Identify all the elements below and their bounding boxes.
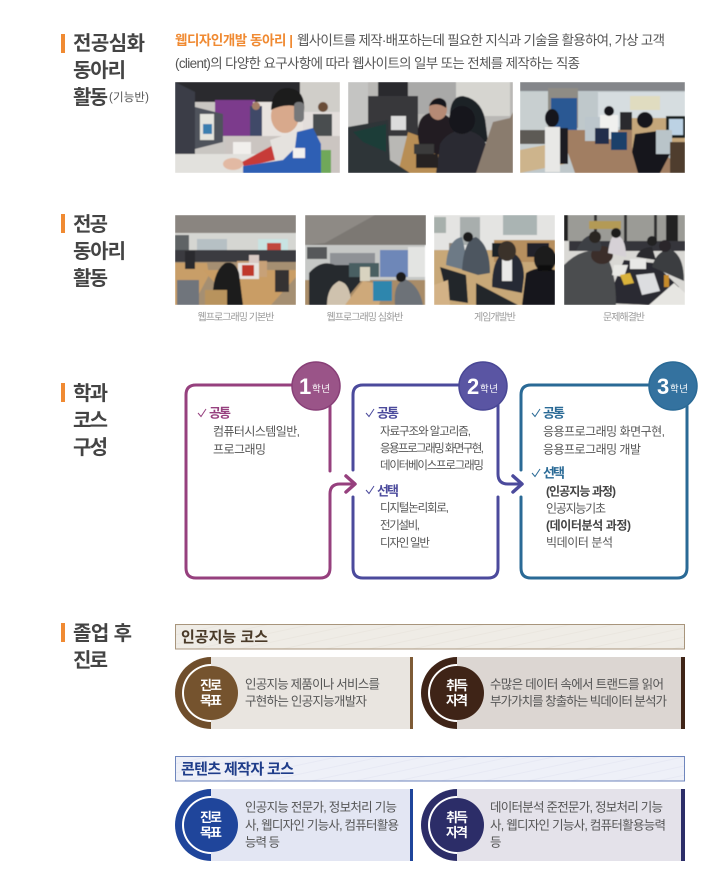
- photo: 웹프로그래밍 기본반: [175, 215, 296, 305]
- panel: 2학년: [353, 362, 522, 578]
- photo: 문제해결반: [564, 215, 685, 305]
- badge: 1학년: [292, 362, 340, 410]
- panel: 콘텐츠 취득 자격: 등: [490, 836, 502, 850]
- list: 공통: [198, 406, 300, 456]
- list: 공통: 응용프로그래밍 화면구현,: [543, 424, 665, 438]
- section heading: 졸업 후 진로: 진로: [73, 649, 108, 672]
- caption: 게임개발반: 게임개발반: [474, 310, 516, 324]
- section heading: 학과 코스 구성: 학과: [73, 382, 108, 405]
- box outline and arrow: 2학년 to 3학년: [353, 385, 522, 578]
- banner: 콘텐츠 제작자 코스: 콘텐츠 제작자 코스: [181, 761, 294, 778]
- caption: 웹프로그래밍 심화반: 웹프로그래밍 심화반: [326, 312, 404, 324]
- panel: 인공지능 취득 자격: 부가가치를 창출하는 빅데이터 분석가: [490, 694, 667, 708]
- list: 선택: 디자인 일반: [380, 536, 430, 550]
- section heading: 전공심화 동아리 활동: 활동: [73, 86, 108, 109]
- list: 공통: 공통: [209, 406, 231, 420]
- badge: 2학년: 2: [467, 374, 479, 399]
- panel: 콘텐츠 진로 목표: 능력 등: [245, 836, 280, 850]
- panel: 인공지능 진로 목표: 진로: [200, 678, 222, 693]
- panel: 인공지능 진로 목표: 목표: [200, 693, 222, 708]
- photo: 웹프로그래밍 심화반: [305, 215, 426, 305]
- list: 선택: 선택: [543, 466, 565, 480]
- banner: 인공지능 코스: [176, 624, 684, 649]
- panel: 콘텐츠 진로 목표: 인공지능 전문가, 정보처리 기능: [245, 800, 397, 814]
- section heading: 졸업 후 진로: 졸업 후: [73, 622, 132, 645]
- section heading: 전공 동아리 활동: 전공: [73, 213, 108, 236]
- panel: 인공지능 진로 목표: 구현하는 인공지능개발자: [245, 694, 367, 708]
- panel: 인공지능 취득 자격: 수많은 데이터 속에서 트랜드를 읽어: [490, 678, 664, 692]
- badge: 2학년: [459, 362, 507, 410]
- panel: 콘텐츠 취득 자격: 자격: [446, 825, 468, 840]
- list: 공통: 데이터베이스프로그래밍: [380, 459, 484, 472]
- list: 공통: [366, 406, 484, 472]
- box outline and arrow: 1학년 to 2학년: [186, 385, 355, 578]
- panel: 콘텐츠 진로 목표: 목표: [200, 825, 222, 840]
- photo: competitor at computer: [175, 82, 340, 173]
- panel: 인공지능 취득 자격: [421, 657, 685, 729]
- badge: 3학년: 3: [657, 374, 669, 399]
- list: 선택: 전기설비,: [380, 519, 420, 532]
- text block: 웹디자인개발 동아리 description: (client)의 다양한 요구사항에 따라 웹사이트의 일부 또는 전체를 제작하는 직종: [175, 56, 580, 71]
- badge: 2학년: 학년: [480, 384, 498, 395]
- list: 선택: (인공지능 과정): [546, 484, 616, 498]
- banner: 인공지능 코스: 인공지능 코스: [181, 629, 268, 646]
- banner: 콘텐츠 제작자 코스: [176, 756, 684, 781]
- section heading: 전공 동아리 활동: 동아리: [73, 240, 126, 263]
- badge: 1학년: 학년: [312, 384, 330, 395]
- text block: 웹디자인개발 동아리 description: [175, 33, 665, 71]
- text block: 웹디자인개발 동아리 description: 웹디자인개발 동아리 |: [175, 33, 293, 48]
- panel: 콘텐츠 취득 자격: 데이터분석 준전문가, 정보처리 기능: [490, 800, 663, 814]
- panel: 인공지능 취득 자격: 취득: [446, 678, 468, 693]
- panel: 콘텐츠 진로 목표: 진로: [200, 810, 222, 825]
- panel: 콘텐츠 취득 자격: 사, 웹디자인 기능사, 컴퓨터활용능력: [490, 818, 666, 832]
- caption: 웹프로그래밍 기본반: 웹프로그래밍 기본반: [198, 312, 274, 324]
- list: 선택: 선택: [377, 484, 399, 498]
- section heading: 전공 동아리 활동: 활동: [73, 267, 108, 290]
- box outline: [521, 385, 687, 578]
- list: 공통: 자료구조와 알고리즘,: [380, 424, 471, 438]
- list: 선택: [532, 466, 631, 550]
- photo: students around a monitor: [348, 82, 513, 173]
- section heading: 학과 코스 구성: 코스: [73, 410, 108, 432]
- list: 공통: 공통: [377, 406, 399, 420]
- panel: 1학년: [186, 362, 355, 578]
- list: 선택: 디지털논리회로,: [380, 500, 449, 514]
- list: 선택: 빅데이터 분석: [546, 536, 613, 550]
- photo: 게임개발반: [434, 215, 556, 305]
- list: 공통: 응용프로그래밍 화면구현,: [380, 442, 484, 455]
- list: 공통: [532, 406, 665, 456]
- section heading: 전공심화 동아리 활동: (기능반): [109, 91, 149, 104]
- list: 선택: (데이터분석 과정): [546, 518, 631, 532]
- photo: classroom with desks: [520, 82, 685, 173]
- panel: 콘텐츠 취득 자격: 취득: [446, 810, 468, 825]
- list: 공통: 공통: [543, 406, 565, 420]
- list: 공통: 프로그래밍: [213, 442, 266, 456]
- section heading: 졸업 후 진로: [61, 622, 132, 672]
- panel: 콘텐츠 취득 자격: [421, 789, 685, 861]
- panel: 콘텐츠 진로 목표: [175, 789, 413, 861]
- list: 공통: 응용프로그래밍 개발: [543, 442, 641, 456]
- caption: 문제해결반: 문제해결반: [603, 310, 645, 324]
- section heading: 학과 코스 구성: 구성: [73, 436, 108, 459]
- section heading: 전공심화 동아리 활동: 동아리: [73, 59, 126, 82]
- section heading: 전공심화 동아리 활동: 전공심화: [73, 32, 145, 55]
- list: 공통: 컴퓨터시스템일반,: [213, 424, 300, 438]
- panel: 3학년: [521, 362, 697, 578]
- list: 선택: 인공지능기초: [546, 502, 606, 516]
- badge: 3학년: 학년: [670, 384, 688, 395]
- panel: 인공지능 취득 자격: 자격: [446, 693, 468, 708]
- section heading: 전공심화 동아리 활동: [61, 32, 149, 109]
- panel: 콘텐츠 진로 목표: 사, 웹디자인 기능사, 컴퓨터활용: [245, 818, 399, 832]
- badge: 1학년: 1: [299, 374, 311, 399]
- panel: 인공지능 진로 목표: 인공지능 제품이나 서비스를: [245, 678, 380, 692]
- panel: 인공지능 진로 목표: [175, 657, 413, 729]
- section heading: 학과 코스 구성: [61, 382, 108, 459]
- text block: 웹디자인개발 동아리 description: 웹사이트를 제작·배포하는데 필요한 지식과 기술을 활용하여, 가상 고객: [297, 33, 665, 48]
- list: 선택: [366, 484, 449, 550]
- section heading: 전공 동아리 활동: [61, 213, 126, 290]
- badge: 3학년: [649, 362, 697, 410]
